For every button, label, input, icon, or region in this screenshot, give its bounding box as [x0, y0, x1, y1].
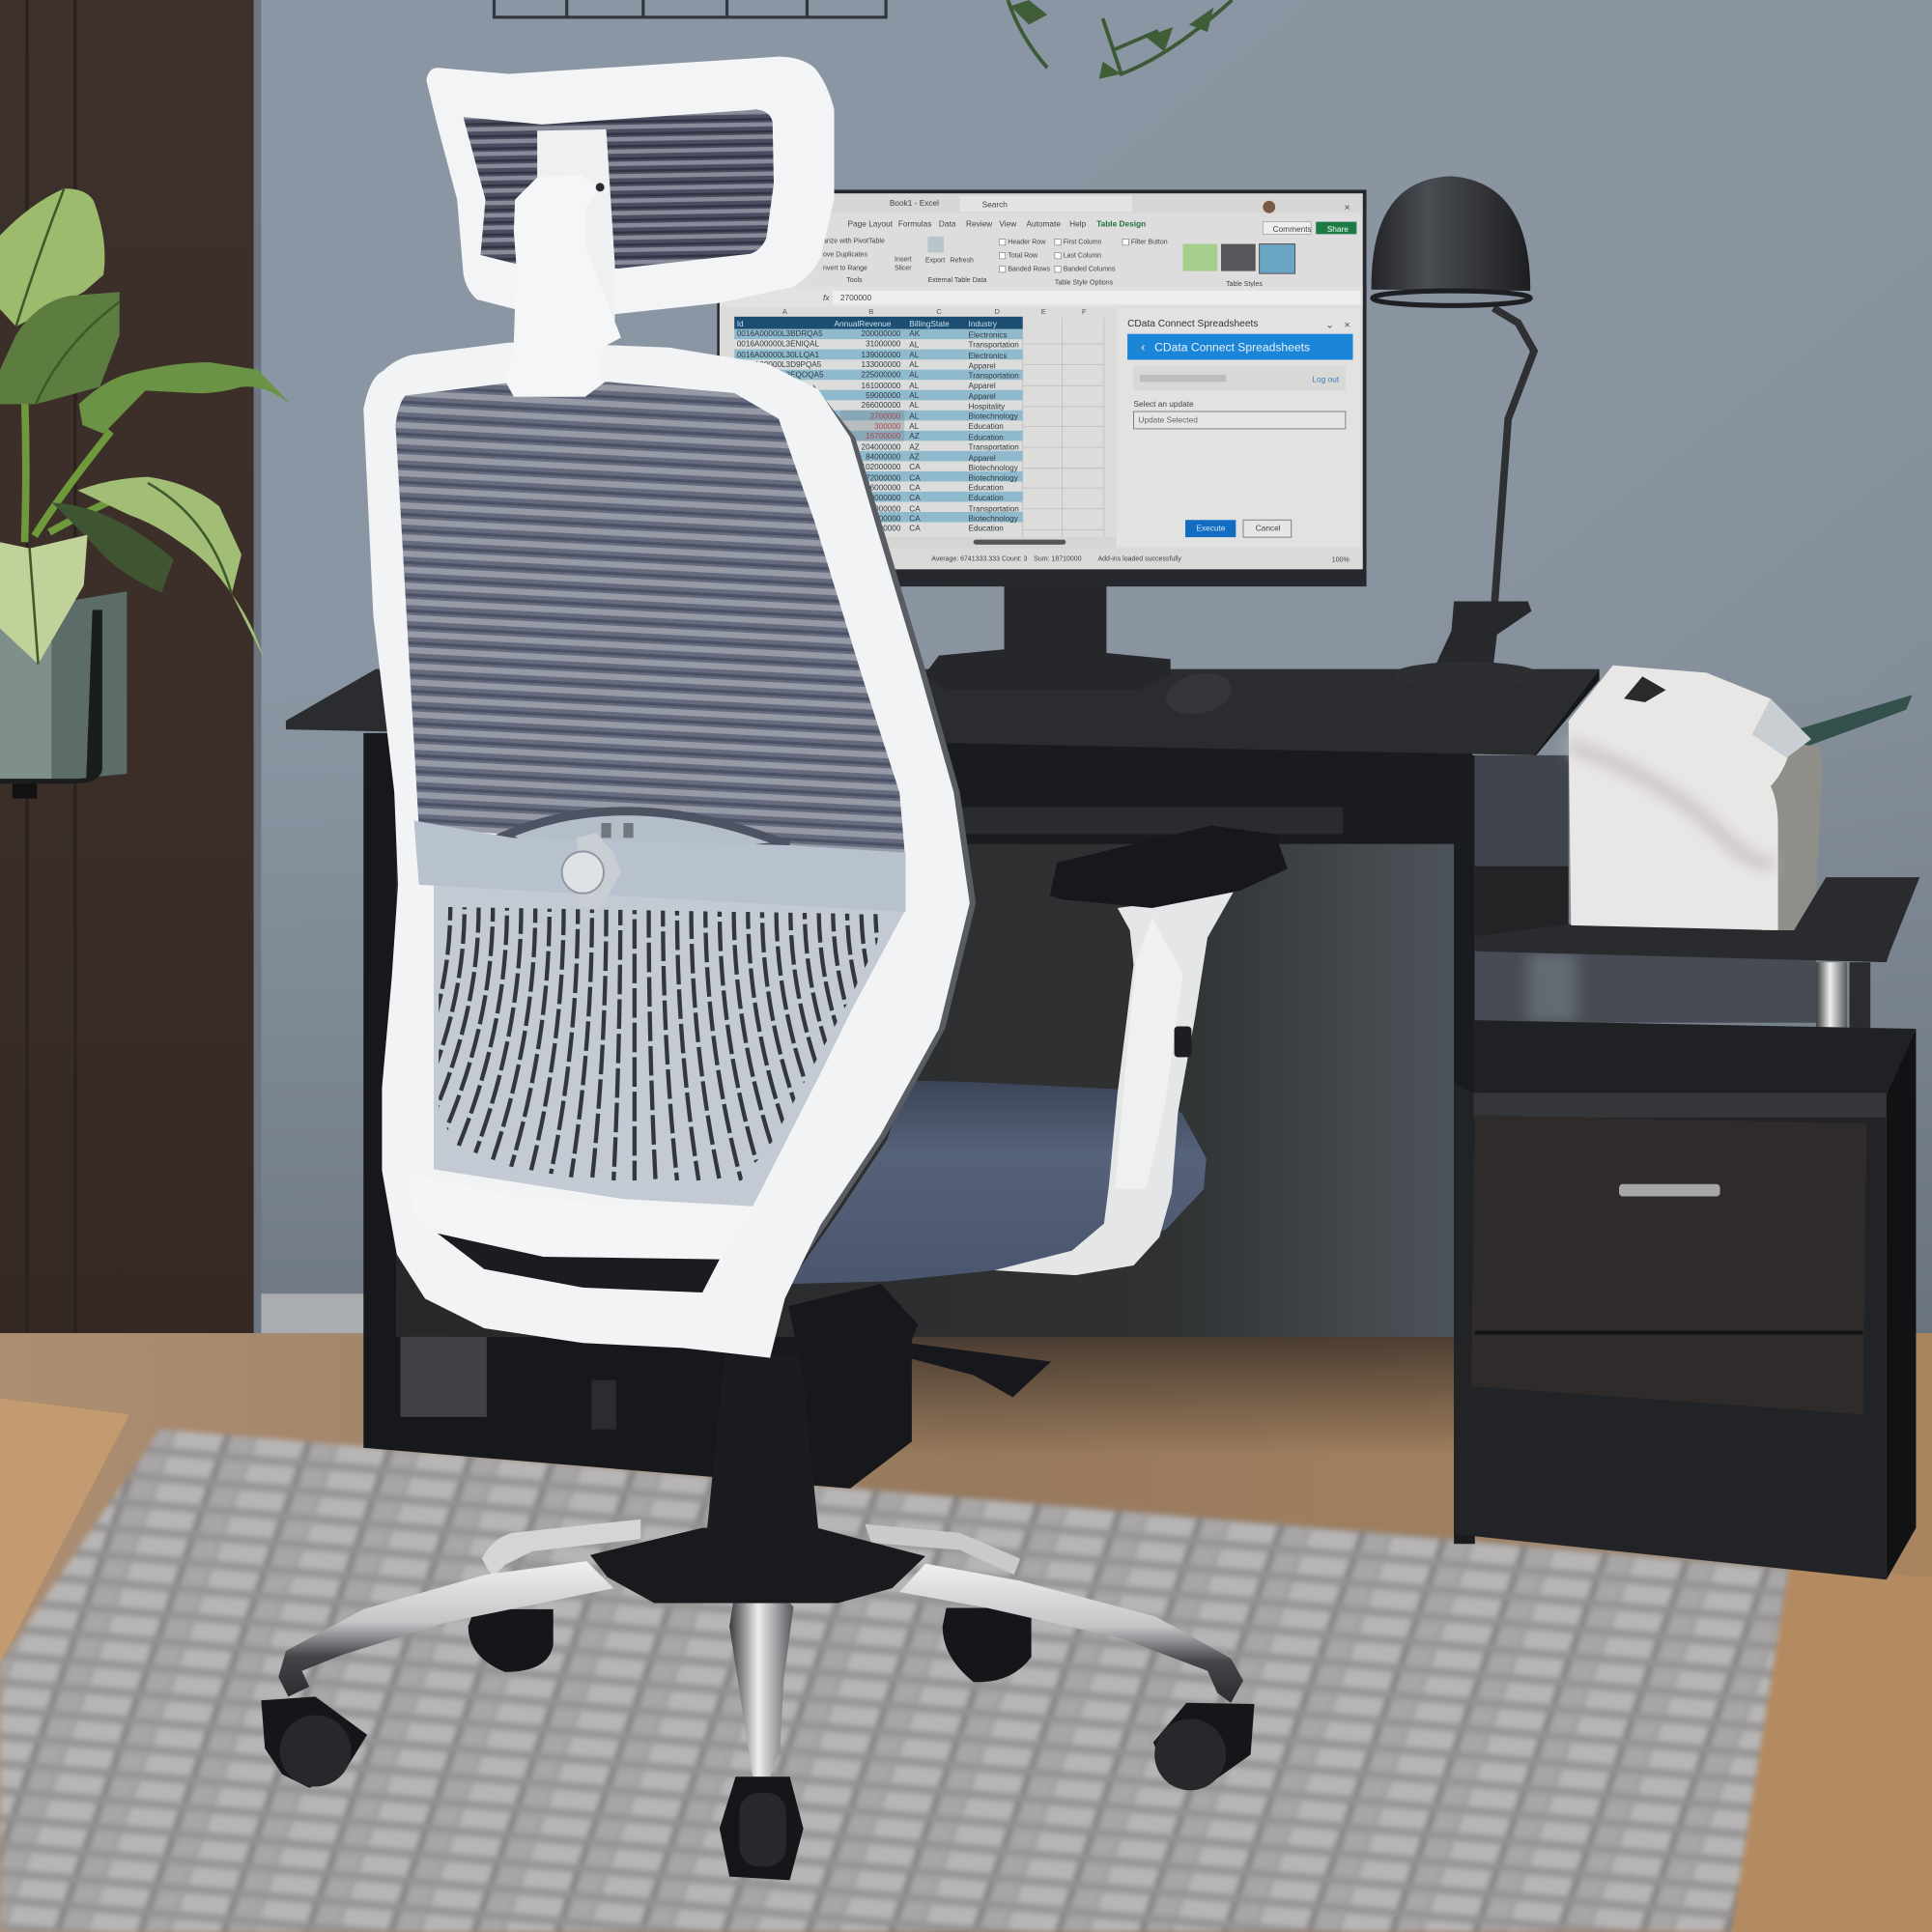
office chair	[261, 57, 1288, 1880]
tilt lever	[890, 1341, 1051, 1397]
table rows: CA	[909, 473, 921, 482]
side panel: ×	[1345, 320, 1350, 330]
table rows: Hospitality	[969, 402, 1006, 411]
ribbon content: Table Styles	[1226, 281, 1263, 288]
table rows: AL	[909, 391, 920, 400]
formula bar: 2700000	[840, 293, 872, 302]
table rows: Biotechnology	[969, 412, 1019, 421]
table rows: Biotechnology	[969, 515, 1019, 524]
table rows: CA	[909, 525, 921, 533]
table rows: Transportation	[969, 372, 1019, 381]
headrest mesh	[464, 110, 774, 269]
table rows: Biotechnology	[969, 464, 1019, 472]
ribbon content: External Table Data	[927, 277, 987, 284]
table rows: Electronics	[969, 330, 1007, 339]
neck bracket	[506, 175, 621, 397]
printer	[1569, 666, 1913, 930]
table rows: 204000000	[862, 443, 901, 452]
table header: AnnualRevenue	[835, 319, 892, 328]
ribbon tabs: Data	[939, 219, 956, 229]
table rows: 0016A00000L3BDRQA5	[737, 329, 823, 338]
table rows: 0016A00000L3ENIQAL	[737, 339, 819, 348]
ribbon content: Insert	[895, 256, 912, 263]
floor	[0, 1333, 1932, 1932]
column letters: F	[1082, 307, 1087, 316]
lower back crossbar	[411, 1175, 753, 1260]
drawer	[1471, 1115, 1866, 1414]
table rows: Education	[969, 494, 1004, 502]
caster right	[1153, 1703, 1254, 1790]
column letters: C	[936, 307, 942, 316]
status bar: Count: 3	[1002, 555, 1028, 562]
column letters: B	[868, 307, 873, 316]
table rows: CA	[909, 515, 921, 524]
desk top	[286, 669, 1600, 755]
seat cushion	[788, 1081, 1207, 1284]
table rows: AL	[909, 360, 920, 369]
table rows: CA	[909, 504, 921, 513]
table rows: 59000000	[866, 391, 901, 400]
table rows: CA	[909, 484, 921, 493]
arm pad	[1050, 826, 1288, 908]
plate slits	[439, 907, 879, 1180]
spreadsheet screen	[720, 193, 1363, 569]
side panel: CData Connect Spreadsheets	[1154, 341, 1310, 355]
printer cover	[1752, 698, 1811, 757]
ribbon content: Tools	[846, 277, 863, 284]
table rows: AZ	[909, 432, 920, 440]
monitor	[717, 189, 1367, 690]
table rows: 16700000	[866, 432, 901, 440]
table rows: 2700000	[870, 412, 901, 421]
wall shadow behind shelves	[1475, 755, 1569, 867]
armrest	[994, 826, 1288, 1275]
paper tray	[1780, 695, 1913, 747]
filing cabinet	[1454, 755, 1919, 1579]
desk lamp	[1372, 176, 1540, 689]
status bar: Average: 6741333.333	[931, 555, 1000, 562]
table rows: 79000000	[866, 515, 901, 524]
back frame mesh edge	[777, 384, 976, 1282]
sheet grid	[720, 307, 1117, 547]
back frame	[363, 343, 970, 1358]
monitor bezel	[717, 189, 1367, 586]
side panel: ⌄	[1325, 320, 1334, 330]
table rows: 0016A00000L3EQOQA5	[737, 370, 824, 379]
table rows	[737, 329, 1019, 533]
ribbon tabs: Formulas	[898, 219, 931, 229]
table rows: 10000000	[866, 525, 901, 533]
caster front	[720, 1776, 804, 1880]
table rows: 31000000	[866, 339, 901, 348]
headrest frame	[426, 57, 835, 314]
stems	[25, 394, 129, 542]
pot	[0, 591, 127, 799]
caster left	[261, 1696, 367, 1788]
ribbon tabs: Automate	[1026, 219, 1061, 229]
table stripes	[734, 329, 1023, 523]
table rows: AL	[909, 382, 920, 390]
potted plant	[0, 188, 291, 799]
table rows: Education	[969, 422, 1004, 431]
table rows: 10000000	[866, 494, 901, 502]
table rows: 39000000	[866, 504, 901, 513]
ribbon tabs: Help	[1069, 219, 1087, 229]
status bar: Sum: 18710000	[1034, 555, 1082, 562]
table rows: Education	[969, 484, 1004, 493]
table rows: 246000000	[862, 484, 901, 493]
table rows: Apparel	[969, 392, 996, 401]
desk	[286, 668, 1600, 1544]
table rows: 300000	[874, 422, 901, 431]
printer slot	[1624, 676, 1665, 702]
ribbon tabs: Review	[966, 219, 992, 229]
table rows: CA	[909, 463, 921, 471]
dark slot	[438, 1234, 720, 1293]
lumbar dial	[562, 833, 621, 909]
title bar: Book1 - Excel	[890, 198, 939, 208]
table rows: AK	[909, 329, 921, 338]
table rows: AL	[909, 401, 920, 410]
table header: Id	[737, 319, 744, 328]
table rows: Biotechnology	[969, 473, 1019, 482]
table header: BillingState	[909, 319, 950, 328]
shadowed wall under desk	[397, 739, 1466, 1337]
cabinet body	[1454, 1084, 1887, 1579]
column letters: D	[994, 307, 1000, 316]
upper headrest bracket	[537, 129, 614, 321]
side panel: Log out	[1312, 374, 1340, 384]
table rows: Apparel	[969, 361, 996, 370]
table header: Industry	[969, 319, 998, 328]
table rows: 84000000	[866, 453, 901, 462]
printer side	[1762, 739, 1822, 930]
table rows: 0016A00000L30LLQA1	[737, 351, 819, 359]
title bar: ×	[1345, 203, 1350, 213]
left desk leg and plinth	[363, 733, 912, 1489]
column letters: A	[782, 307, 788, 316]
casters	[261, 1696, 1254, 1880]
table rows: Electronics	[969, 352, 1007, 360]
table rows: AZ	[909, 453, 920, 462]
table rows: 102000000	[862, 463, 901, 471]
title bar	[835, 193, 1363, 213]
shelf posts	[1816, 962, 1847, 1101]
ribbon tabs: Share	[1327, 224, 1349, 234]
status bar: Add-ins loaded successfully	[1097, 555, 1181, 562]
right desk leg	[1454, 755, 1475, 1544]
upper shelf	[1475, 877, 1919, 962]
side panel	[1127, 319, 1352, 538]
wooden wall panel	[0, 0, 261, 1333]
computer mouse	[1162, 668, 1236, 720]
table rows: Transportation	[969, 504, 1019, 513]
arm post	[994, 892, 1234, 1275]
headrest	[426, 57, 835, 397]
ribbon content: Last Column	[1064, 253, 1101, 260]
lumbar support plate	[413, 807, 906, 1207]
table rows: 161000000	[862, 382, 901, 390]
table rows: CA	[909, 494, 921, 502]
ribbon content: nvert to Range	[823, 265, 867, 271]
side panel: ‹	[1141, 340, 1145, 355]
ribbon content: Banded Rows	[1008, 267, 1050, 273]
side panel: Update Selected	[1139, 414, 1198, 424]
table rows: 225000000	[862, 370, 901, 379]
ribbon content: Export	[925, 258, 945, 265]
ribbon content: First Column	[1064, 240, 1102, 246]
ribbon content: Filter Button	[1131, 240, 1168, 246]
table rows: Transportation	[969, 443, 1019, 452]
table rows: Transportation	[969, 341, 1019, 350]
back mesh	[395, 382, 906, 863]
cabinet top	[1474, 1020, 1916, 1094]
table rows: AL	[909, 412, 920, 421]
column letters: E	[1041, 307, 1046, 316]
ribbon content: Header Row	[1008, 240, 1046, 246]
status bar	[889, 539, 1363, 570]
table rows: Apparel	[969, 454, 996, 463]
side panel: Select an update	[1133, 399, 1194, 409]
ribbon content: Slicer	[895, 265, 912, 271]
leaves	[0, 188, 104, 327]
printer body	[1569, 666, 1793, 930]
status bar: 100%	[1332, 557, 1350, 564]
formula bar: fx	[823, 293, 830, 302]
side panel: Cancel	[1256, 524, 1281, 533]
table rows: 200000000	[862, 329, 901, 338]
table rows: Apparel	[969, 382, 996, 390]
lumbar hub behind band	[505, 811, 788, 850]
lumbar band	[414, 820, 906, 912]
rug	[0, 1430, 1789, 1932]
monitor stand	[924, 579, 1171, 690]
table rows: AL	[909, 351, 920, 359]
table rows: Education	[969, 433, 1004, 441]
skirting board	[259, 1293, 493, 1336]
ribbon tabs: View	[999, 219, 1016, 229]
table rows: 272000000	[862, 473, 901, 482]
gas lift cylinder	[706, 1355, 819, 1540]
column letters	[782, 309, 1086, 314]
table rows: 139000000	[862, 351, 901, 359]
ribbon content: arize with PivotTable	[823, 238, 885, 244]
table rows: Education	[969, 525, 1004, 533]
table rows: 266000000	[862, 401, 901, 410]
ribbon content: Table Style Options	[1055, 280, 1114, 287]
base hub	[590, 1528, 925, 1603]
chrome legs	[278, 1561, 1243, 1776]
title bar: Search	[982, 199, 1008, 209]
side panel: CData Connect Spreadsheets	[1127, 319, 1258, 329]
ribbon tabs: Page Layout	[848, 219, 894, 229]
table header	[734, 317, 1023, 329]
ribbon tabs: Table Design	[1096, 219, 1146, 229]
desk underside	[370, 739, 1472, 844]
ribbon tabs	[848, 219, 1356, 234]
ribbon content	[823, 237, 1295, 288]
drawer handle	[1619, 1184, 1720, 1197]
hanging plant at top	[1008, 0, 1233, 79]
side panel: Execute	[1197, 524, 1226, 533]
wall	[252, 0, 1932, 1337]
wall frame at top	[494, 0, 886, 17]
ribbon content: Banded Columns	[1064, 267, 1116, 273]
lumbar clip	[601, 823, 634, 838]
tilt mechanism	[788, 1284, 918, 1370]
formula bar	[823, 287, 1363, 307]
table rows: 133000000	[862, 360, 901, 369]
table rows: AL	[909, 370, 920, 379]
chair base back legs	[469, 1520, 1032, 1682]
ribbon content: Total Row	[1008, 253, 1038, 260]
table rows: AL	[909, 341, 920, 350]
ribbon content: ove Duplicates	[823, 251, 867, 258]
ribbon tabs: Comments	[1273, 224, 1312, 234]
table rows: 0016A00000L3D9PQA5	[737, 360, 822, 369]
table rows: AZ	[909, 443, 920, 452]
table rows: AL	[909, 422, 920, 431]
ribbon content: Refresh	[950, 258, 974, 265]
